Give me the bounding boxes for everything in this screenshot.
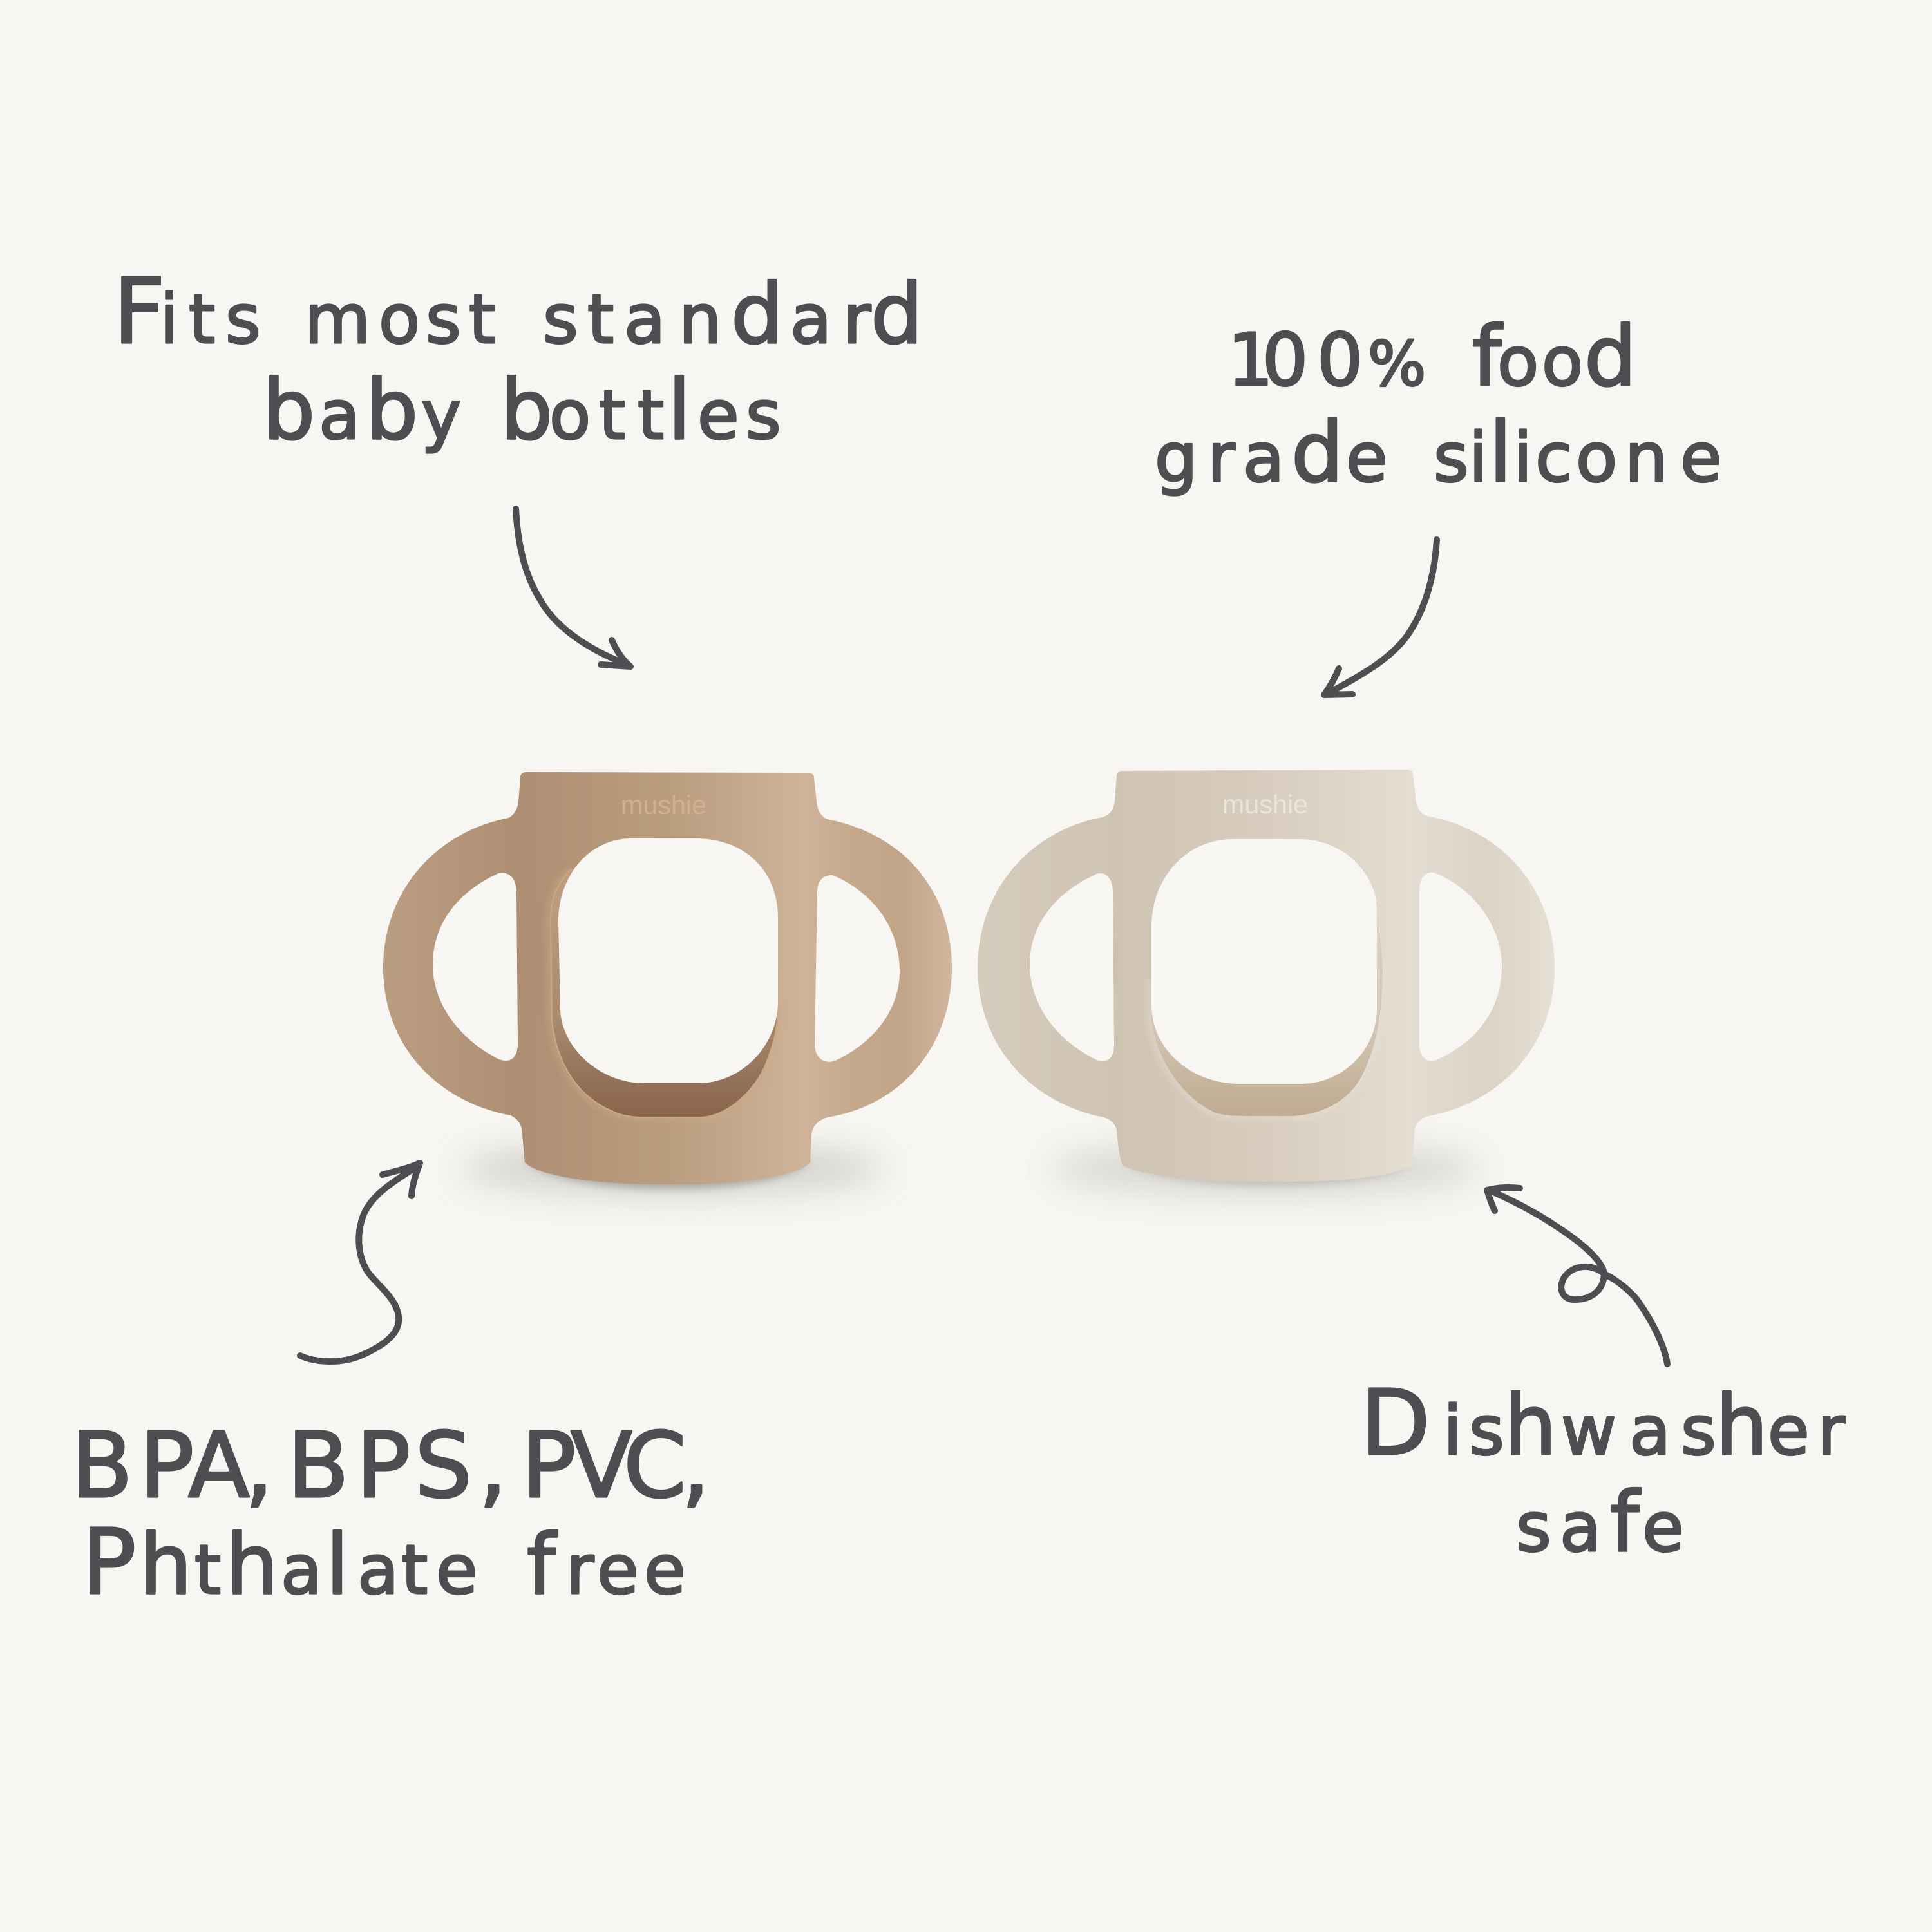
arrow: from BPA text to tan mug [300,1163,420,1361]
shadow [1050,1142,1481,1196]
text line: safe: safe [1516,1475,1684,1571]
arrow: from silicone text to cream mug [1324,540,1437,695]
soft rim around cut-out [551,869,778,1117]
centre window [1151,839,1377,1084]
text line: Fits most standard: Fits most standard [113,260,923,365]
text line: Phthalate free: Phthalate free [82,1510,686,1615]
mug body and handles [383,772,952,1184]
text line: grade silicone: grade silicone [1155,405,1722,501]
callout: Dishwasher safe [1361,1371,1846,1571]
shadow [460,1142,886,1196]
text line: Dishwasher: Dishwasher [1361,1371,1846,1476]
mug body and handles [978,770,1555,1182]
arrow: from dishwasher text to cream mug [1487,1188,1667,1364]
mug: tan silicone handle [383,772,952,1196]
mug: cream silicone handle [978,770,1555,1196]
text line: baby bottles: baby bottles [263,363,781,459]
callout: BPA, BPS, PVC, Phthalate free [71,1414,710,1615]
soft rim around cut-out [1150,966,1383,1116]
text line: BPA, BPS, PVC,: BPA, BPS, PVC, [71,1414,710,1519]
centre window [558,838,778,1083]
inner cut-out back wall [1151,902,1383,1116]
text line: 100% food: 100% food [1227,309,1636,405]
arrow: from fits text to tan mug [516,509,630,667]
embossed logo: mushie [621,790,706,820]
inner cut-out back wall [551,869,778,1117]
callout: 100% food grade silicone [1155,309,1722,501]
embossed logo: mushie [1222,790,1308,819]
callout: fits most standard baby bottles [113,260,923,459]
